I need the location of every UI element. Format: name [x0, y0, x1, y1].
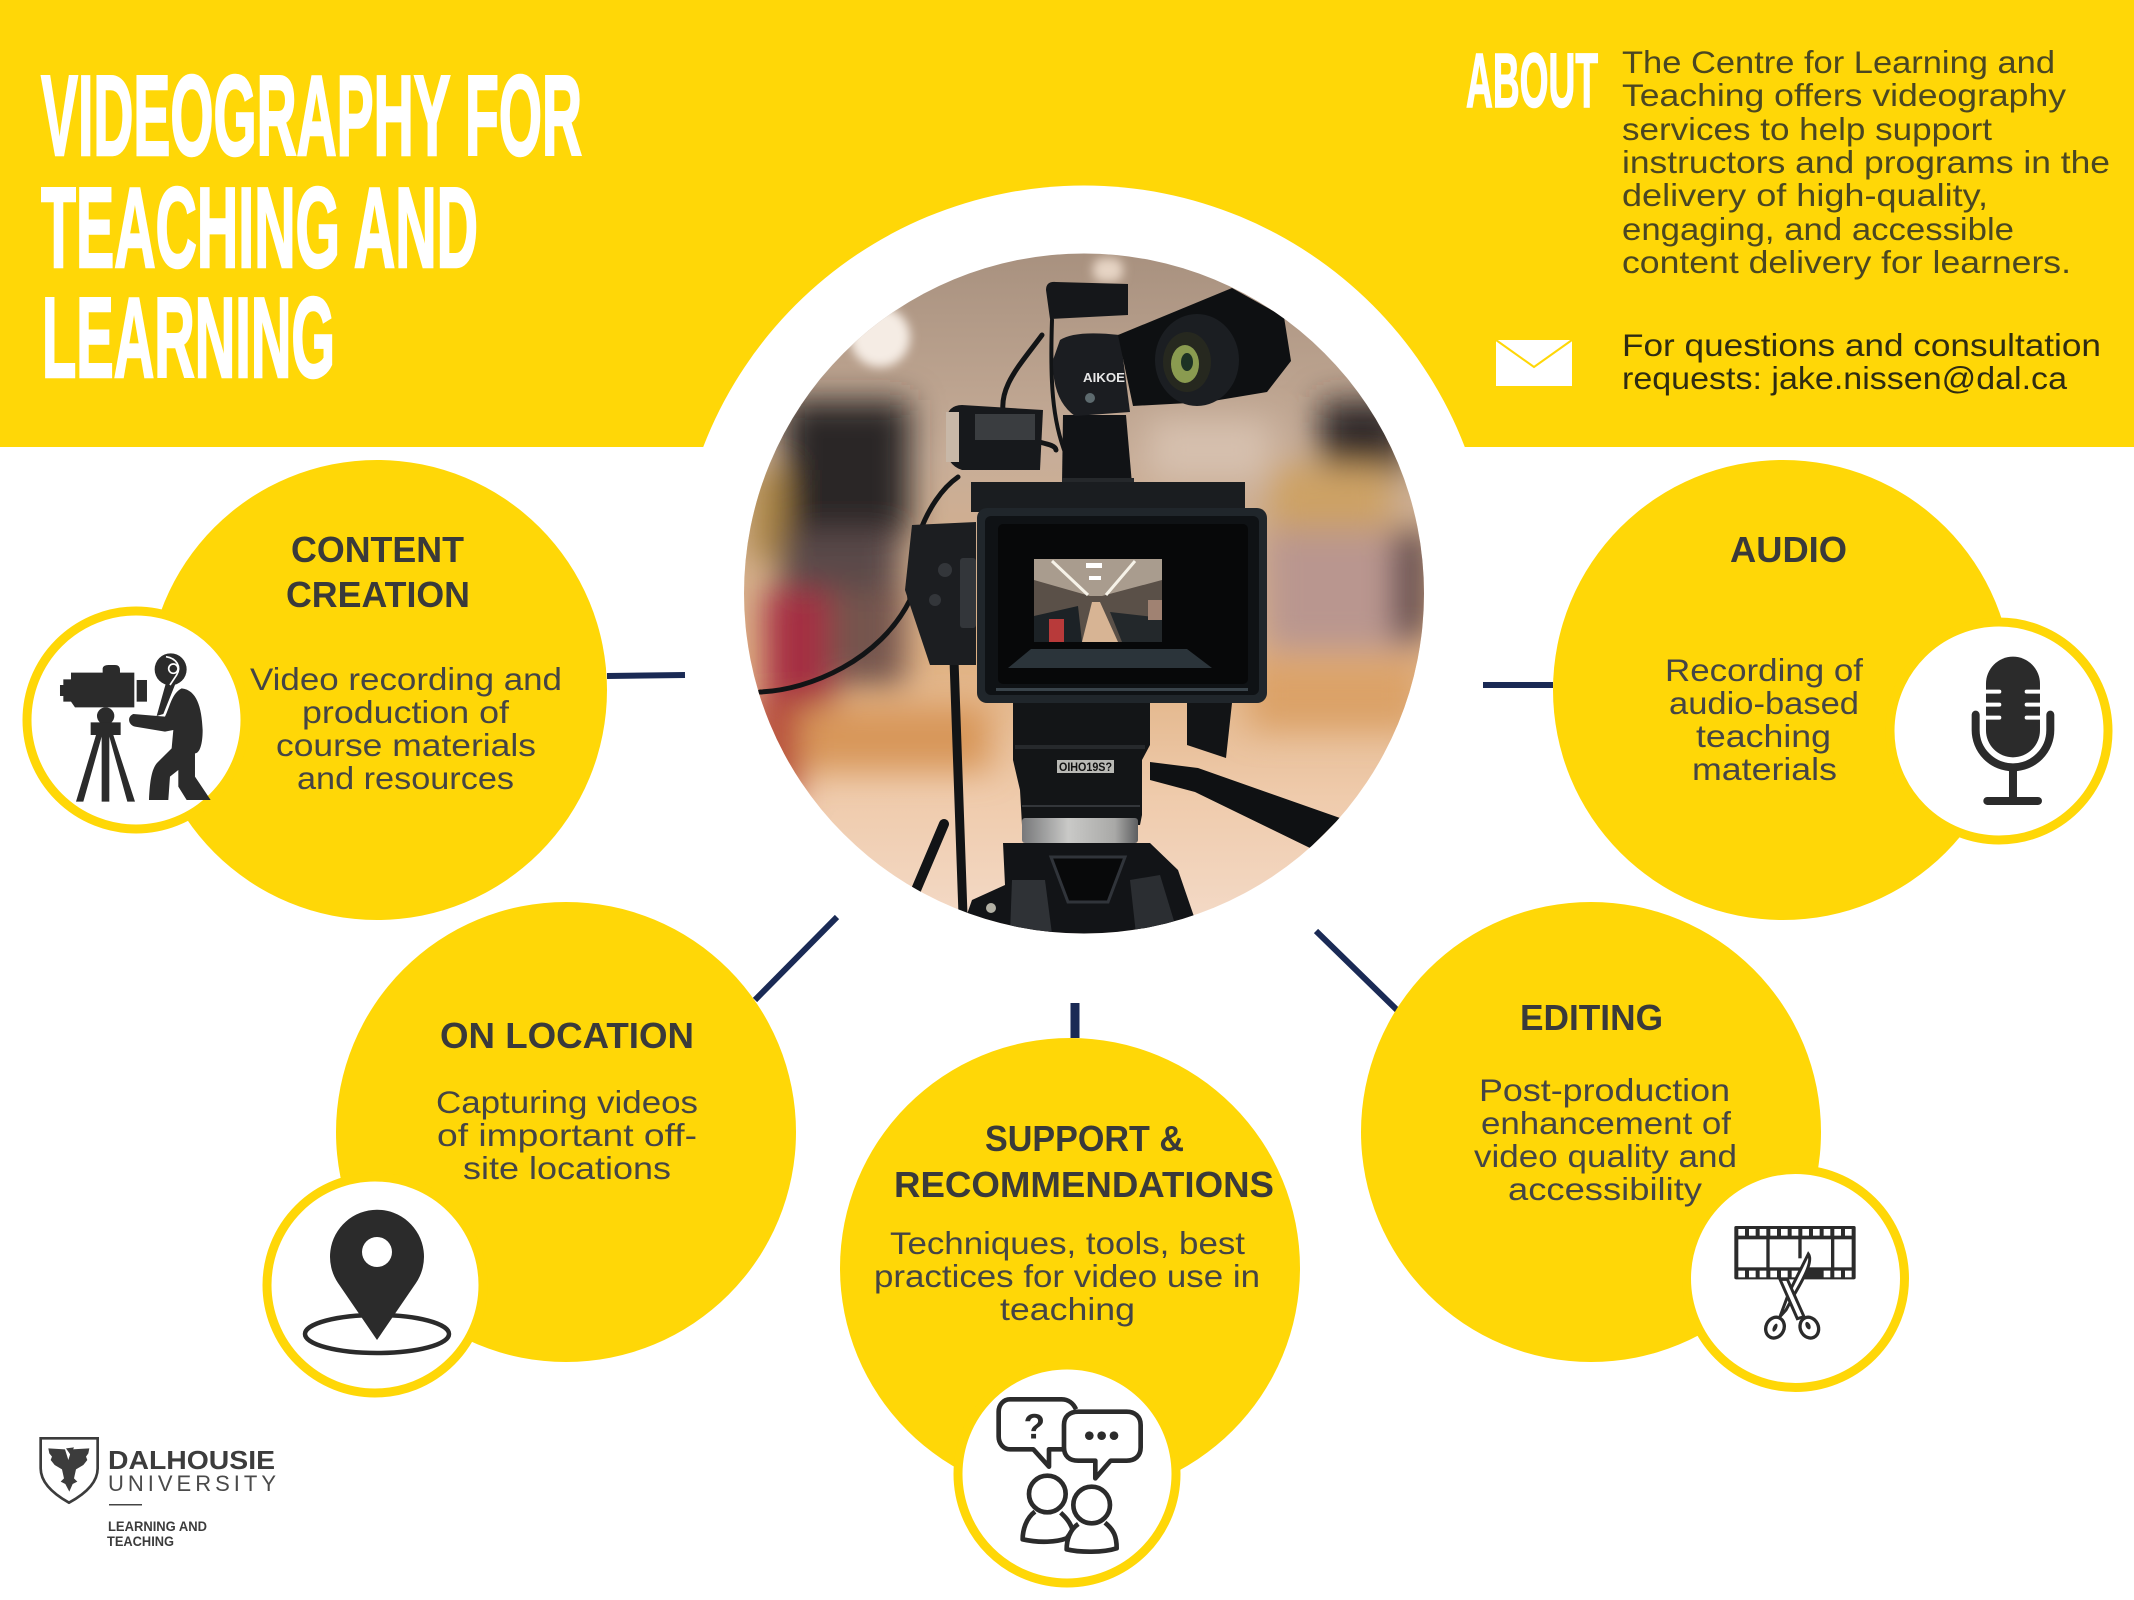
icon: videographer [27, 611, 245, 829]
viewfinder body [1053, 333, 1130, 416]
about text: engaging, and accessible [1622, 211, 2014, 247]
logo: Dalhousie University: DALHOUSIE [108, 1445, 275, 1475]
left camera body [905, 522, 976, 665]
body: editing: accessibility [1508, 1171, 1702, 1207]
heading: audio: AUDIO [1730, 529, 1847, 570]
logo: Dalhousie University: LEARNING AND [108, 1519, 207, 1534]
heading: support and recommendations [894, 1118, 1274, 1205]
logo: Dalhousie University: TEACHING [107, 1534, 174, 1549]
heading: editing: EDITING [1520, 997, 1663, 1038]
body: support and recommendations: practices for video use in [874, 1258, 1260, 1294]
monitor hood [977, 508, 1267, 703]
body: audio: audio-based [1669, 685, 1859, 721]
body: content creation: and resources [297, 760, 514, 796]
central camera photo [744, 253, 1425, 934]
heading: content creation: CREATION [286, 574, 470, 615]
heading: on location: ON LOCATION [440, 1015, 694, 1056]
heading: support and recommendations: RECOMMENDATIONS [894, 1164, 1274, 1205]
icon: map pin [267, 1177, 483, 1393]
left top unit [946, 405, 1043, 470]
body: support and recommendations: teaching [1000, 1291, 1135, 1327]
about text: The Centre for Learning and [1622, 44, 2055, 80]
connector lines [607, 675, 1553, 1038]
icon: envelope [1496, 340, 1572, 386]
body: editing [1474, 1072, 1737, 1207]
logo: Dalhousie University: UNIVERSITY [108, 1471, 276, 1496]
contact text: For questions and consultation [1622, 327, 2101, 363]
heading: content creation: CONTENT [291, 529, 464, 570]
body: on location: Capturing videos [436, 1084, 698, 1120]
body: content creation: production of [302, 694, 509, 730]
central camera photo: AIKOE [1083, 370, 1125, 385]
lens label [1057, 760, 1114, 773]
tripod head [960, 843, 1200, 934]
body: support and recommendations [874, 1225, 1260, 1327]
title: TEACHING AND [41, 165, 478, 292]
body: editing: video quality and [1474, 1138, 1737, 1174]
viewfinder top handle [1046, 282, 1128, 319]
text: VIDEOGRAPHY FOR [41, 53, 582, 180]
central camera photo: OIHO19S? [1059, 760, 1112, 774]
panel: content creation [27, 460, 607, 920]
pan handle [1150, 762, 1340, 848]
body: audio [1665, 652, 1863, 787]
body: on location: of important off- [437, 1117, 697, 1153]
top mount [1062, 415, 1132, 484]
cables [760, 320, 1066, 915]
body: editing: Post-production [1479, 1072, 1730, 1108]
body: content creation: Video recording and [250, 661, 562, 697]
about text: instructors and programs in the [1622, 144, 2110, 180]
lens column [1013, 703, 1150, 825]
panel: editing [1361, 902, 1904, 1388]
top box behind monitor [971, 482, 1245, 512]
white arc behind photo [676, 186, 1492, 1002]
panel: on location [267, 902, 796, 1393]
about text: services to help support [1622, 111, 1992, 147]
silver ring [1022, 818, 1138, 843]
body: on location: site locations [463, 1150, 671, 1186]
body: content creation: course materials [276, 727, 536, 763]
heading: content creation [286, 529, 470, 615]
contact text [1622, 327, 2101, 396]
heading: support and recommendations: SUPPORT & [985, 1118, 1184, 1159]
title [41, 53, 582, 402]
contact text: requests: jake.nissen@dal.ca [1622, 360, 2068, 396]
icon: microphone [1890, 622, 2108, 840]
panel: support and recommendations [840, 1038, 1300, 1583]
icon: conversation: ? [1024, 1407, 1045, 1446]
body: audio: materials [1692, 751, 1837, 787]
logo: Dalhousie University [41, 1438, 276, 1549]
header band [0, 0, 2134, 447]
icon: shield crest [41, 1438, 98, 1503]
title: LEARNING [42, 275, 335, 402]
body: editing: enhancement of [1481, 1105, 1731, 1141]
about text: content delivery for learners. [1622, 244, 2071, 280]
text: ABOUT [1466, 38, 1598, 124]
body: audio: Recording of [1665, 652, 1863, 688]
viewfinder hood [1118, 288, 1291, 406]
body: support and recommendations: Techniques, tools, best [890, 1225, 1245, 1261]
panel: audio [1553, 460, 2108, 920]
about text [1622, 44, 2110, 280]
body: content creation [250, 661, 562, 796]
about text: Teaching offers videography [1622, 77, 2066, 113]
body: on location [436, 1084, 698, 1186]
icon: conversation [958, 1365, 1176, 1583]
icon: film and scissors [1686, 1170, 1904, 1388]
monitor screen [1034, 559, 1162, 642]
about text: delivery of high-quality, [1622, 177, 1988, 213]
body: audio: teaching [1696, 718, 1831, 754]
